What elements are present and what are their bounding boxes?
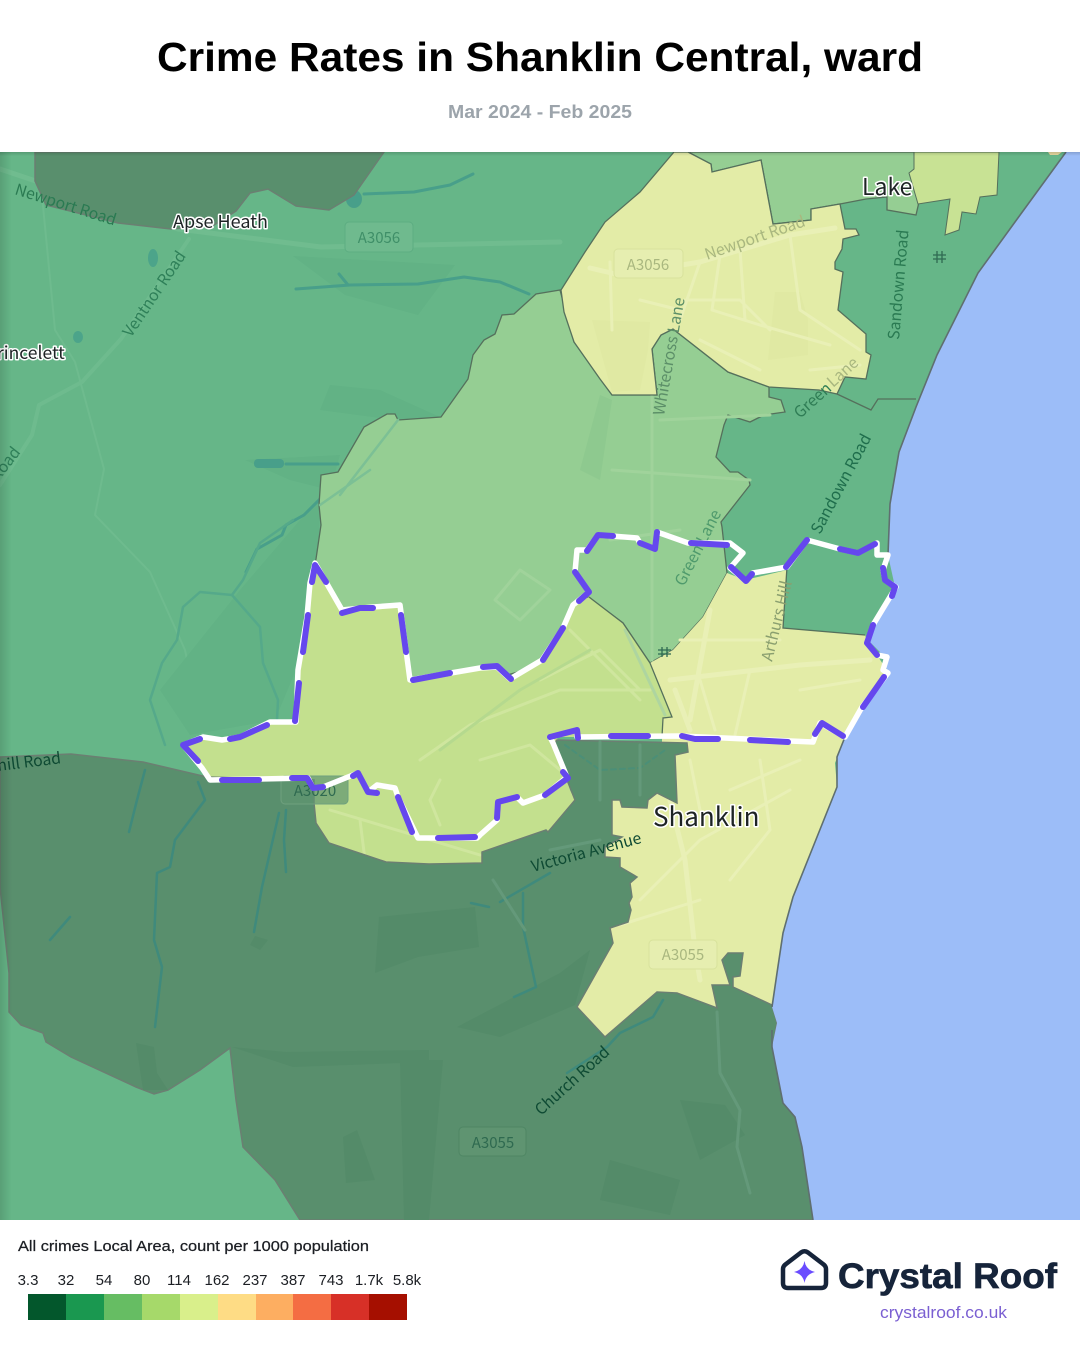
header: title and date range [157,34,923,122]
legend scale labels: 5.8k [393,1272,422,1289]
ward fill yellow-green [183,563,672,864]
legend scale labels: 237 [242,1272,268,1289]
place labels: Shanklin [653,797,760,834]
zone divider lines [783,394,916,635]
icon: house with star [783,1251,826,1288]
road labels: Newport Road [701,209,808,265]
roads in pale yellow area north [590,228,860,370]
road shield A3055 south [459,1127,526,1156]
road and water detail in the base area [0,169,560,745]
road labels: Green [788,376,836,423]
place labels: Lake [862,168,912,202]
road labels: Arthurs Hill [755,578,797,663]
sea [772,152,1080,1220]
road shield A3020: A3020 [294,780,336,801]
road labels: Sandown Road [881,229,914,340]
road labels [0,177,914,1120]
road shield A3056 east [614,249,683,278]
patches in pale yellow area [592,320,650,392]
road shield A3056 west: A3056 [358,227,400,248]
road labels: Ventnor Road [116,246,191,341]
forest patches and streams in dark area [50,742,750,1220]
legend scale labels: 32 [58,1272,74,1289]
dark green area north west [35,152,384,229]
legend scale labels: 3.3 [18,1272,38,1289]
date range: Mar 2024 - Feb 2025 [448,102,632,122]
map: crime rate choropleth [0,152,1080,1220]
road labels: Newport Road [12,177,120,230]
road labels: Church Road [529,1040,614,1120]
legend scale labels: 743 [318,1272,344,1289]
website address: crystalroof.co.uk [880,1304,1008,1322]
place labels: Apse Heath [173,208,268,234]
logo: Crystal Roof [780,1249,1058,1322]
pale yellow area east and Shanklin town [560,570,888,1040]
ward dividing line [589,597,672,737]
road shield A3055 town [649,940,717,969]
road labels: Victoria Avenue [528,825,644,877]
legend scale labels: 80 [134,1272,150,1289]
map edge shading [0,152,1080,1220]
road shield A3055 south: A3055 [472,1132,514,1153]
road labels: Green Lane [668,505,726,589]
legend scale labels: 387 [280,1272,306,1289]
roads and railway in ward [330,630,665,860]
coastline [772,152,1066,1220]
road labels: Sandown Road [804,429,876,537]
ward boundary: white line with purple dashes [183,532,896,838]
icon: railway station markers [658,251,946,657]
legend title: All crimes Local Area, count per 1000 population [18,1238,369,1255]
legend scale labels: 1.7k [355,1272,384,1289]
legend: colour scale [18,1238,422,1320]
base medium green area [0,152,1080,1220]
Lake light green area [688,152,919,224]
road shield A3055 town: A3055 [662,944,704,965]
legend scale labels: 54 [96,1272,112,1289]
title: Crime Rates in Shanklin Central, ward [157,34,923,80]
dark green area south [0,740,813,1220]
legend scale labels: 114 [167,1272,191,1289]
Lake yellow-green area [909,152,999,235]
pale yellow area north [561,152,871,395]
light green central area [315,290,785,700]
logo wordmark: Crystal Roof [838,1257,1057,1296]
legend scale labels [18,1272,422,1289]
road labels: Lane [821,351,863,392]
road detail in central area [320,395,770,660]
legend colour swatches [28,1294,407,1320]
roads in pale yellow area east [620,610,870,980]
road shield A3056 east: A3056 [627,254,669,275]
road shield A3056 west [345,222,413,252]
place labels [0,168,912,834]
road labels: Whitecross Lane [646,295,690,417]
legend scale labels: 162 [204,1272,230,1289]
top right corner area [1048,152,1062,155]
road shield A3020 [281,776,348,804]
